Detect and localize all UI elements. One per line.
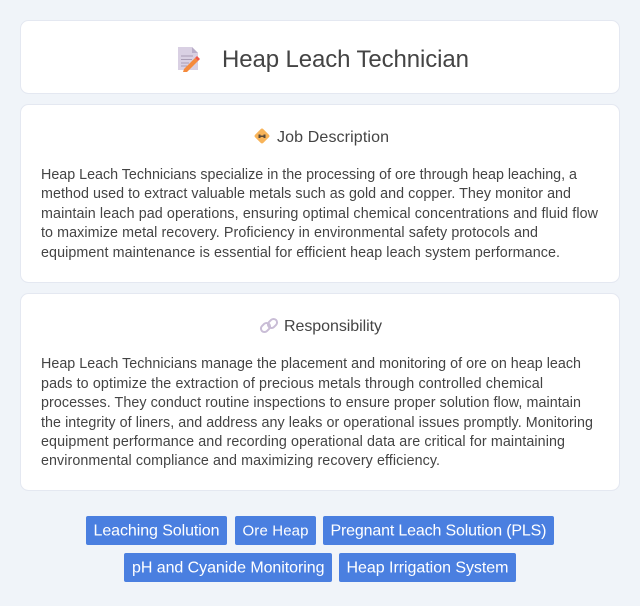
panel: title card	[20, 20, 620, 94]
tag: Pregnant Leach Solution (PLS): Pregnant Leach Solution (PLS)	[330, 522, 546, 540]
text block: responsibility: Heap Leach Technicians manage the placement and monitoring of ore on heap leach	[41, 356, 581, 372]
heading: responsibility: Responsibility	[284, 318, 382, 335]
tag: Pregnant Leach Solution (PLS)	[323, 516, 554, 545]
text block: responsibility	[41, 356, 593, 469]
icon: diamond road sign	[254, 128, 270, 144]
panel: job description	[20, 104, 620, 282]
text block: job description: equipment maintenance is essential for efficient heap leach system performance.	[41, 245, 560, 261]
text block: job description: method used to extract valuable metals such as gold and copper. They monitor and	[41, 186, 571, 202]
text block: responsibility: processes. They conduct routine inspections to ensure proper solution flow, maintain	[41, 395, 581, 411]
text block: job description: maintain leach pad operations, ensuring optimal chemical concentrations and fluid flow	[41, 206, 599, 222]
heading: job description: Job Description	[277, 129, 389, 146]
panel: responsibility	[20, 294, 620, 490]
icon: document with pencil	[178, 47, 200, 72]
tag: Ore Heap	[235, 516, 316, 545]
tag: Leaching Solution	[86, 516, 227, 545]
tag: Heap Irrigation System	[339, 553, 516, 582]
text block: responsibility: pads to optimize the extraction of precious metals through controlled chemical	[41, 376, 543, 392]
text block: responsibility: the integrity of liners, and address any leaks or operational issues promptly. Monitoring	[41, 415, 593, 431]
tag: pH and Cyanide Monitoring: pH and Cyanide Monitoring	[132, 560, 324, 576]
tag: Heap Irrigation System: Heap Irrigation System	[346, 560, 508, 576]
text block: job description: to maximize metal recovery. Proficiency in environmental safety protocols and	[41, 225, 538, 241]
title: Heap Leach Technician	[222, 46, 469, 73]
text block: job description	[41, 167, 599, 261]
tag: Ore Heap: Ore Heap	[242, 522, 308, 540]
icon: chain link	[259, 317, 279, 334]
text block: responsibility: environmental compliance and maximizing recovery efficiency.	[41, 453, 440, 469]
text block: job description: Heap Leach Technicians specialize in the processing of ore through heap leaching, a	[41, 167, 577, 183]
tag: pH and Cyanide Monitoring	[124, 553, 332, 582]
text block: responsibility: equipment performance and recording operational data are critical for maintaining	[41, 434, 565, 450]
tag: Leaching Solution: Leaching Solution	[94, 522, 220, 540]
